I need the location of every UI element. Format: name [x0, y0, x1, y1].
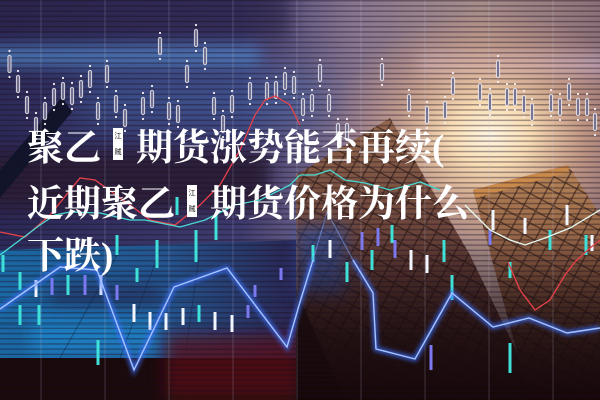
title line 1 continued: 期货涨势能否再续(: [136, 128, 444, 169]
building: centre tower: [296, 118, 540, 400]
missing glyph box 2: 贼: [188, 206, 196, 212]
missing glyph box 2: 江: [188, 190, 196, 196]
title line 2: 近期聚乙: [27, 184, 175, 225]
title line 3: 下跌): [27, 236, 113, 277]
building: right tower: [473, 165, 600, 400]
missing glyph box 1: 贼: [114, 148, 122, 156]
dark diagonal strip: [0, 97, 72, 198]
teal line: [0, 170, 600, 255]
title line 1: 聚乙: [27, 128, 101, 169]
sun glow: [330, 10, 600, 260]
red line: [0, 96, 600, 310]
floor panel, lower left: [0, 240, 300, 400]
solid candlesticks: [3, 197, 592, 373]
missing glyph box 1: [113, 128, 123, 160]
missing glyph box 1: 江: [114, 132, 122, 140]
missing glyph box 2: [187, 185, 197, 217]
title line 2 continued: 期货价格为什么: [210, 184, 469, 225]
blue line: [0, 212, 600, 370]
hollow candlesticks: [10, 25, 595, 159]
title: [27, 128, 469, 277]
bottom shade: [296, 235, 600, 400]
